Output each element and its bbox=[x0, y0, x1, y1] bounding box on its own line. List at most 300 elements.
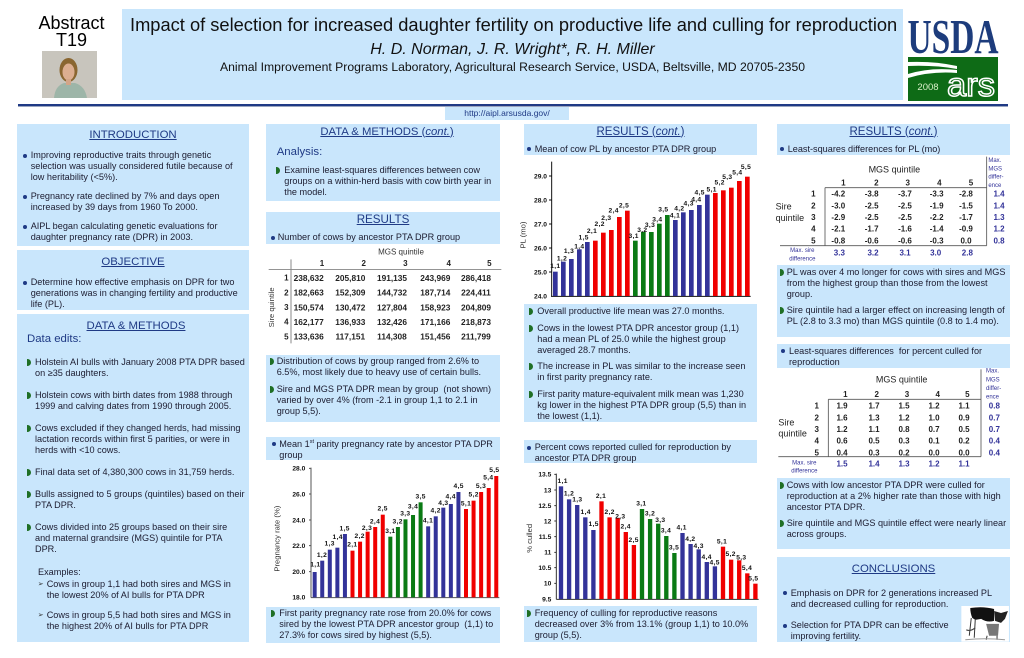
table: PL differences: -1.7 bbox=[865, 225, 879, 234]
bullet: cow groups: DPR. bbox=[35, 544, 57, 554]
bar chart: productive life: 1,3 bbox=[564, 248, 574, 255]
bullet: cow groups bbox=[27, 522, 227, 554]
bullet: overall mean: Overall productive life mean was 27.0 months. bbox=[537, 306, 724, 316]
table: culled differences: difference bbox=[791, 469, 818, 475]
bullet: first parity rate: 27.3% for cows sired by highest (5,5). bbox=[279, 630, 432, 640]
bullet: distribution bbox=[270, 356, 481, 377]
bar chart: productive life: 2,3 bbox=[601, 215, 611, 222]
bullet: distribution: Distribution of cows by group ranged from 2.6% to bbox=[277, 356, 479, 366]
table: PL differences: -3.8 bbox=[865, 190, 879, 199]
example: group 5,5: Cows in group 5,5 had both sires and MGS in bbox=[47, 610, 231, 620]
bar chart: pregnancy rate: Pregnancy rate (%) bbox=[273, 505, 282, 572]
table: culled differences: 4 bbox=[935, 390, 940, 399]
bullet: bull groups: Bulls assigned to 5 groups (quintiles) based on their bbox=[35, 489, 244, 499]
panel: culling finding bbox=[524, 606, 757, 642]
bullet: Holstein cows bbox=[27, 390, 232, 411]
bullet: cow groups: and maternal grandsire (MGS) quintile for PTA bbox=[35, 532, 222, 542]
bar chart: productive life: 2,5 bbox=[619, 202, 629, 209]
bar chart: percent culled: 2,5 bbox=[629, 537, 639, 544]
table: number of cows: 151,456 bbox=[420, 332, 451, 342]
bar chart: productive life: 5,4 bbox=[732, 170, 742, 177]
bar chart: productive life: 5,3 bbox=[722, 174, 732, 181]
table: number of cows: 4 bbox=[284, 318, 289, 327]
bullet: Holstein cows: Holstein cows with birth dates from 1988 through bbox=[35, 390, 232, 400]
bullet: low ancestor culled: reproduction at a 2% higher rate than those with high bbox=[787, 490, 1001, 500]
bar chart: pregnancy rate: 26.0 bbox=[292, 491, 306, 498]
bullet: lowest group: had a mean PL of 25.0 while the highest group bbox=[537, 334, 726, 344]
table: PL differences: difference bbox=[789, 256, 816, 262]
bullet: increase in PL: The increase in PL was similar to the increase seen bbox=[537, 360, 745, 370]
table: number of cows: 150,574 bbox=[294, 302, 324, 312]
bullet: milk mean: First parity mature-equivalent milk mean was 1,230 bbox=[537, 388, 744, 398]
bullet: reproductive traits: Improving reproductive traits through genetic bbox=[31, 150, 211, 160]
bullet: objective text: life (PL). bbox=[31, 299, 65, 309]
panel: distribution notes bbox=[266, 355, 500, 422]
panel: results continued, productive life bbox=[524, 124, 757, 155]
table: PL differences: 3.3 bbox=[834, 248, 845, 257]
bullet: lowest group: averaged 28.7 months. bbox=[537, 344, 631, 354]
table: number of cows: 1 bbox=[320, 259, 325, 268]
table: culled differences: ence bbox=[986, 395, 1000, 401]
table: culled differences: 1.1 bbox=[958, 459, 970, 468]
table: PL differences: -0.6 bbox=[898, 236, 912, 245]
bullet: bull groups bbox=[27, 489, 244, 510]
bar chart: pregnancy rate: 3,2 bbox=[393, 518, 403, 525]
bullet: exclusions: lactation records within first 5 parities, or were in bbox=[35, 434, 230, 444]
bullet: exclusions bbox=[27, 423, 240, 455]
table: culled differences: 4 bbox=[814, 437, 819, 446]
table: culled differences: 0.0 bbox=[928, 448, 940, 457]
table: culled differences: 1.5 bbox=[836, 459, 848, 468]
table: number of cows: 133,636 bbox=[294, 332, 324, 342]
bar chart: percent culled: 12.5 bbox=[538, 503, 552, 510]
bar chart: productive life: 25.0 bbox=[534, 269, 547, 276]
bar chart: percent culled: 1,1 bbox=[558, 478, 568, 485]
bar chart: pregnancy rate: 5,3 bbox=[476, 483, 486, 490]
bar chart: percent culled: 4,2 bbox=[685, 536, 695, 543]
bullet: mean first parity: group bbox=[279, 450, 303, 460]
table: number of cows: 136,933 bbox=[335, 317, 366, 327]
bar chart: pregnancy rate: 2,3 bbox=[362, 525, 372, 532]
table: PL differences: 2.8 bbox=[962, 248, 973, 257]
table: number of cows: 3 bbox=[403, 259, 408, 268]
bullet: lowest group bbox=[529, 322, 739, 355]
bar chart: pregnancy rate: 5,1 bbox=[461, 501, 471, 508]
table: PL differences: 3 bbox=[811, 213, 816, 222]
bar chart: percent culled: 2,1 bbox=[596, 493, 606, 500]
bullet: sire and MGS mean: Sire and MGS PTA DPR mean by group (not shown) bbox=[277, 384, 491, 394]
bullet: frequency of culling: decreased over 3% from 13.1% (group 1,1) to 10.0% bbox=[535, 619, 748, 629]
table: PL differences: -3.0 bbox=[831, 201, 846, 210]
icon: USDA ARS logo: ars bbox=[947, 66, 995, 103]
table: culled differences: 2 bbox=[874, 390, 879, 399]
table: culled differences: 1 bbox=[814, 402, 819, 411]
bullet: low ancestor culled: Cows with low ancestor PTA DPR were culled for bbox=[787, 480, 985, 490]
table: culled differences: Max. sire bbox=[792, 460, 817, 466]
bar chart: productive life: 3,1 bbox=[629, 233, 639, 240]
bar chart: productive life: 29.0 bbox=[534, 173, 547, 180]
table: PL differences: -2.5 bbox=[898, 201, 912, 210]
table: number of cows: 171,166 bbox=[420, 317, 451, 327]
bullet: AIPL evaluations: AIPL began calculating genetic evaluations for bbox=[31, 221, 218, 231]
table: PL differences: 5 bbox=[811, 236, 816, 245]
bar chart: percent culled: 5,5 bbox=[748, 576, 758, 583]
example: group 1,1: the lowest 20% of AI bulls for PTA DPR bbox=[47, 590, 205, 600]
table: number of cows: 117,151 bbox=[336, 332, 366, 342]
bullet: objective text bbox=[23, 277, 238, 309]
bar chart: percent culled: 4,5 bbox=[710, 559, 720, 566]
table: number of cows: 187,714 bbox=[420, 288, 451, 298]
table: PL differences: Max. sire bbox=[790, 248, 815, 254]
bullet: AIPL evaluations bbox=[23, 221, 218, 242]
table: PL differences: 2 bbox=[811, 201, 816, 210]
table: culled differences: 0.8 bbox=[989, 402, 1000, 411]
table: number of cows: 130,472 bbox=[335, 302, 366, 312]
table: culled differences: 1.6 bbox=[836, 413, 848, 422]
bar chart: productive life: PL (mo) bbox=[518, 221, 527, 248]
heading: data and methods cont: DATA & METHODS (cont.) bbox=[320, 126, 454, 138]
bar chart: pregnancy rate: 4,2 bbox=[431, 508, 441, 515]
bullet: AIPL evaluations: daughter pregnancy rate (DPR) in 2003. bbox=[31, 232, 193, 242]
icon: USDA ARS logo bbox=[908, 9, 999, 103]
panel: data and methods continued bbox=[266, 124, 500, 201]
table: number of cows: 4 bbox=[446, 259, 451, 268]
bullet: pregnancy rate: Pregnancy rate declined by 7% and days open bbox=[31, 191, 219, 201]
table: number of cows: 286,418 bbox=[461, 273, 491, 283]
bar chart: pregnancy rate: 4,3 bbox=[438, 500, 448, 507]
table: number of cows: 218,873 bbox=[461, 317, 491, 327]
bullet: mean first parity bbox=[272, 438, 493, 460]
table: PL differences: MGS quintile bbox=[869, 165, 920, 175]
bullet: least-squares PL: Least-squares differences for PL (mo) bbox=[788, 144, 940, 154]
bar chart: productive life: 5,2 bbox=[715, 180, 725, 187]
bullet: sire quintile effect: PL (2.8 to 3.3 mo) than MGS quintile (0.8 to 1.4 mo). bbox=[787, 316, 999, 326]
panel: pregnancy rate finding bbox=[266, 607, 500, 643]
table: PL differences: -1.4 bbox=[930, 225, 944, 234]
table: culled differences: 0.8 bbox=[898, 425, 910, 434]
panel: pregnancy rate caption bbox=[266, 437, 500, 460]
subheading: data edits: Data edits: bbox=[27, 333, 81, 345]
bar chart: productive life: 2,4 bbox=[609, 208, 619, 215]
bullet: Holstein AI bulls: on ≥35 daughters. bbox=[35, 368, 108, 378]
table: culled differences: 0.4 bbox=[989, 437, 1000, 446]
bullet: frequency of culling: Frequency of culling for reproductive reasons bbox=[535, 608, 717, 618]
bar chart: productive life: 4,1 bbox=[670, 212, 680, 219]
table: PL differences bbox=[776, 156, 1005, 262]
table: number of cows: 2 bbox=[361, 259, 366, 268]
table: culled differences: 1.3 bbox=[868, 413, 880, 422]
table: number of cows: 5 bbox=[487, 259, 492, 268]
bullet: reproductive traits: selection was usually considered futile because of bbox=[31, 161, 233, 171]
bullet: first parity rate: sired by the lowest PTA DPR ancestor group (1,1) to bbox=[279, 619, 493, 629]
table: culled differences: 1.1 bbox=[868, 425, 880, 434]
table: PL differences: -0.6 bbox=[865, 236, 879, 245]
bar chart: percent culled: 5,4 bbox=[742, 565, 752, 572]
panel: data and methods: ➢ bbox=[38, 580, 44, 588]
bullet: Holstein AI bulls bbox=[27, 357, 245, 378]
abstract label: Abstract bbox=[38, 13, 105, 33]
bullet: exclusions: Cows excluded if they changed herds, had missing bbox=[35, 423, 240, 433]
url bar: http://aipl.arsusda.gov/ bbox=[464, 108, 550, 118]
table: culled differences: 1.4 bbox=[868, 459, 880, 468]
bullet: frequency of culling: group (5,5). bbox=[535, 630, 582, 640]
table: culled differences: 0.3 bbox=[868, 448, 880, 457]
table: culled differences: 1.2 bbox=[928, 402, 940, 411]
bar chart: percent culled: 2,4 bbox=[621, 524, 631, 531]
bullet: PL over 4 months bbox=[780, 266, 1005, 299]
bar chart: pregnancy rate: 2,1 bbox=[347, 542, 357, 549]
bullet: pregnancy rate: increased by 39 days from 1960 To 2000. bbox=[31, 202, 198, 212]
bar chart: percent culled: 1,5 bbox=[589, 521, 599, 528]
example: group 1,1 bbox=[38, 579, 231, 600]
table: culled differences: 0.9 bbox=[958, 413, 970, 422]
bar chart: percent culled: 5,3 bbox=[736, 555, 746, 562]
bar chart: productive life: 3,5 bbox=[658, 207, 668, 214]
bar chart: percent culled: 13.5 bbox=[538, 472, 552, 479]
table: culled differences: 1.5 bbox=[898, 402, 910, 411]
bar chart: pregnancy rate: 3,5 bbox=[416, 494, 426, 501]
bar chart: pregnancy rate: 3,1 bbox=[385, 528, 395, 535]
bar chart: productive life: 27.0 bbox=[534, 221, 547, 228]
table: PL differences: -2.1 bbox=[831, 225, 846, 234]
bullet: increase in PL bbox=[529, 360, 745, 382]
bullet: nearly linear bbox=[787, 518, 1006, 540]
bar chart: productive life: 3,3 bbox=[645, 222, 655, 229]
example: group 5,5: the highest 20% of AI bulls for PTA DPR bbox=[47, 621, 208, 631]
bullet: selection for PTA DPR: improving fertility. bbox=[791, 631, 861, 641]
table: number of cows: 205,810 bbox=[335, 273, 366, 283]
table: number of cows: 158,923 bbox=[420, 302, 451, 312]
bullet: percent culled: Percent cows reported culled for reproduction by bbox=[535, 442, 731, 452]
bar chart: pregnancy rate: 5,2 bbox=[469, 492, 479, 499]
bullet: lowest group: Cows in the lowest PTA DPR ancestor group (1,1) bbox=[537, 322, 739, 332]
table: number of cows: 152,309 bbox=[335, 288, 366, 298]
table: number of cows: 224,411 bbox=[461, 288, 491, 298]
table: number of cows: 243,969 bbox=[420, 273, 451, 283]
table: PL differences: -2.5 bbox=[865, 213, 879, 222]
table: PL differences: 1.3 bbox=[993, 213, 1005, 222]
bar chart: productive life: 1,4 bbox=[574, 244, 584, 251]
bar chart: productive life: 4,5 bbox=[695, 190, 705, 197]
table: PL differences: ence bbox=[988, 183, 1002, 189]
icon: USDA ARS logo: 2008 bbox=[917, 82, 939, 93]
bar chart: percent culled: 3,4 bbox=[661, 527, 671, 534]
bar chart: percent culled: 12 bbox=[544, 518, 552, 525]
table: number of cows: 144,732 bbox=[377, 288, 407, 298]
table: culled differences: 1.2 bbox=[836, 425, 848, 434]
table: PL differences: 1.4 bbox=[993, 190, 1005, 199]
panel: culled differences caption bbox=[777, 344, 1010, 368]
table: number of cows: MGS quintile bbox=[378, 247, 424, 256]
bullet: nearly linear: across groups. bbox=[787, 529, 847, 539]
panel: introduction bbox=[17, 124, 249, 246]
heading: conclusions: CONCLUSIONS bbox=[852, 563, 935, 575]
table: PL differences: -1.9 bbox=[930, 201, 944, 210]
bar chart: pregnancy rate: 4,4 bbox=[446, 493, 456, 500]
bar chart: pregnancy rate: 18.0 bbox=[292, 595, 306, 602]
bullet: PL over 4 months: group. bbox=[787, 288, 813, 298]
bullet: PL over 4 months: PL was over 4 mo longer for cows with sires and MGS bbox=[787, 266, 1005, 276]
bullet: sire quintile effect: Sire quintile had a larger effect on increasing length of bbox=[787, 305, 1005, 315]
table: number of cows: 132,426 bbox=[377, 317, 407, 327]
table: culled differences: 0.3 bbox=[898, 437, 910, 446]
bullet: low ancestor culled bbox=[787, 480, 1001, 512]
bar chart: productive life: 4,4 bbox=[691, 196, 701, 203]
bar chart: percent culled: 4,3 bbox=[694, 543, 704, 550]
bar chart: pregnancy rate: 5,4 bbox=[483, 475, 493, 482]
bullet: objective text: Determine how effective emphasis on DPR for two bbox=[31, 277, 234, 287]
table: PL differences: -2.9 bbox=[831, 213, 846, 222]
table: PL differences: Max. bbox=[988, 158, 1002, 164]
bullet: sire and MGS mean: group 5,5). bbox=[277, 406, 321, 416]
table: culled differences: 0.7 bbox=[989, 413, 1000, 422]
bullet: least-squares culled: reproduction bbox=[789, 356, 840, 366]
table: culled differences: 5 bbox=[814, 448, 819, 457]
bullet: reproductive traits: low heritability (<5%). bbox=[31, 172, 118, 182]
panel: conclusions bbox=[777, 557, 1010, 642]
icon: cow image bbox=[961, 606, 1009, 642]
table: PL differences: 2 bbox=[874, 178, 879, 187]
bullet: frequency of culling bbox=[527, 608, 748, 640]
bullet: mean first parity: Mean 1st parity pregnancy rate by ancestor PTA DPR bbox=[279, 438, 493, 448]
table: culled differences: 0.7 bbox=[989, 425, 1000, 434]
table: culled differences: MGS bbox=[986, 377, 1000, 383]
table: number of cows: 114,308 bbox=[377, 332, 407, 342]
bar chart: percent culled: 11 bbox=[544, 550, 552, 557]
table: PL differences: differ- bbox=[988, 175, 1004, 181]
panel: productive life findings bbox=[524, 304, 757, 422]
table: number of cows bbox=[267, 247, 502, 344]
table: PL differences: -3.3 bbox=[930, 190, 944, 199]
heading: results cont: RESULTS (cont.) bbox=[596, 126, 684, 138]
bullet: analysis text bbox=[276, 164, 491, 196]
bar chart: productive life: 24.0 bbox=[534, 293, 547, 300]
table: culled differences: MGS quintile bbox=[876, 375, 927, 385]
bar chart: pregnancy rate: 4,5 bbox=[454, 483, 464, 490]
table: culled differences: Max. bbox=[986, 369, 999, 375]
bar chart: productive life: 2,2 bbox=[595, 221, 605, 228]
bullet: analysis text: the model. bbox=[284, 186, 327, 196]
table: culled differences: 1.0 bbox=[928, 413, 940, 422]
table: PL differences: 1 bbox=[811, 190, 816, 199]
bar chart: pregnancy rate bbox=[273, 466, 500, 602]
table: PL differences: Sire bbox=[776, 202, 792, 212]
bullet: reproductive traits bbox=[23, 150, 233, 182]
bullet: cow groups: Cows divided into 25 groups based on their sire bbox=[35, 522, 227, 532]
bar chart: percent culled: 3,1 bbox=[636, 501, 646, 508]
bar chart: percent culled: 2,2 bbox=[605, 509, 615, 516]
bullet: PL over 4 months: from the highest group than those from the lowest bbox=[787, 278, 988, 288]
abstract label bbox=[38, 13, 105, 50]
bullet: sire and MGS mean bbox=[270, 384, 491, 416]
examples label: Examples: bbox=[38, 566, 81, 576]
bar chart: pregnancy rate: 3,3 bbox=[400, 511, 410, 518]
bar chart: percent culled bbox=[525, 472, 759, 603]
bar chart: percent culled: 3,2 bbox=[645, 511, 655, 518]
panel: PL difference findings bbox=[777, 265, 1010, 337]
bar chart: percent culled: 10 bbox=[544, 581, 552, 588]
table: PL differences: -2.5 bbox=[898, 213, 912, 222]
table: number of cows: 204,809 bbox=[461, 302, 491, 312]
bar chart: pregnancy rate: 3,4 bbox=[408, 503, 418, 510]
bullet: emphasis on DPR: Emphasis on DPR for 2 generations increased PL bbox=[791, 588, 992, 598]
table: PL differences: 1.4 bbox=[993, 201, 1005, 210]
affiliation: Animal Improvement Programs Laboratory, Agricultural Research Service, USDA, Beltsville, MD 20705-2350 bbox=[220, 60, 805, 74]
table: PL differences: -0.3 bbox=[930, 236, 944, 245]
bullet: pregnancy rate bbox=[23, 191, 219, 212]
panel: data and methods: ➢ bbox=[38, 611, 44, 619]
table: culled differences bbox=[770, 368, 1024, 478]
table: PL differences: -2.5 bbox=[865, 201, 879, 210]
table: number of cows: 238,632 bbox=[294, 273, 324, 283]
abstract label: T19 bbox=[56, 30, 87, 50]
table: culled differences: 1.9 bbox=[836, 402, 848, 411]
panel: culling caption bbox=[524, 440, 757, 463]
table: number of cows: 2 bbox=[284, 288, 289, 297]
bullet: milk mean: kg lower in the highest PTA DPR group (5,5) than in bbox=[537, 400, 746, 410]
example: group 5,5 bbox=[38, 610, 231, 631]
table: culled differences: 0.0 bbox=[958, 448, 970, 457]
table: culled differences: 2 bbox=[814, 413, 819, 422]
table: PL differences: 3.2 bbox=[867, 248, 879, 257]
heading: introduction: INTRODUCTION bbox=[89, 129, 177, 141]
bar chart: percent culled: 4,4 bbox=[702, 554, 712, 561]
bar chart: productive life: 3,4 bbox=[652, 216, 662, 223]
bar chart: productive life: 1,2 bbox=[557, 256, 567, 263]
bar chart: percent culled: 11.5 bbox=[539, 534, 552, 541]
bar chart: pregnancy rate: 28.0 bbox=[292, 466, 306, 473]
heading: objective: OBJECTIVE bbox=[101, 256, 165, 268]
table: culled differences: 0.1 bbox=[928, 437, 940, 446]
bar chart: productive life: 5,5 bbox=[741, 164, 751, 171]
bullet: number of cows: Number of cows by ancestor PTA DPR group bbox=[278, 232, 460, 242]
bar chart: pregnancy rate: 22.0 bbox=[292, 543, 306, 550]
table: culled differences: 0.2 bbox=[958, 437, 970, 446]
bullet: emphasis on DPR bbox=[791, 588, 992, 610]
table: PL differences: -2.8 bbox=[959, 190, 973, 199]
bullet: selection for PTA DPR: Selection for PTA DPR can be effective bbox=[791, 620, 949, 630]
table: culled differences: 0.2 bbox=[898, 448, 910, 457]
bullet: Holstein cows: 1999 and calving dates from 1990 through 2005. bbox=[35, 400, 231, 410]
table: number of cows: 5 bbox=[284, 332, 289, 341]
table: culled differences: 1.7 bbox=[868, 402, 880, 411]
table: culled differences: 0.4 bbox=[836, 448, 848, 457]
table: number of cows: Sire quintile bbox=[267, 287, 276, 327]
bullet: first parity rate bbox=[271, 608, 493, 640]
table: PL differences: 5 bbox=[969, 178, 974, 187]
header rule bbox=[18, 104, 1008, 106]
table: PL differences: 1 bbox=[841, 178, 846, 187]
bullet: analysis text: groups on a within-herd basis with cow birth year in bbox=[284, 176, 491, 186]
bar chart: productive life: 4,2 bbox=[674, 205, 684, 212]
url bar bbox=[445, 107, 569, 120]
bar chart: percent culled: % culled bbox=[525, 524, 534, 553]
table: PL differences: 4 bbox=[811, 225, 816, 234]
bar chart: productive life: 2,1 bbox=[587, 228, 597, 235]
table: PL differences: -3.7 bbox=[898, 190, 912, 199]
bullet: milk mean: the lowest (1,1). bbox=[537, 410, 602, 420]
table: culled differences: 3 bbox=[814, 425, 819, 434]
bar chart: productive life: 28.0 bbox=[534, 197, 547, 204]
author photo bbox=[42, 51, 97, 98]
bar chart: productive life: 3,2 bbox=[637, 227, 647, 234]
bar chart: pregnancy rate: 20.0 bbox=[292, 569, 306, 576]
table: PL differences: 4 bbox=[937, 178, 942, 187]
bar chart: productive life: 4,3 bbox=[684, 201, 694, 208]
table: number of cows: 162,177 bbox=[294, 317, 324, 327]
table: PL differences: -1.6 bbox=[898, 225, 912, 234]
bullet: final data set: Final data set of 4,380,300 cows in 31,759 herds. bbox=[35, 467, 234, 477]
